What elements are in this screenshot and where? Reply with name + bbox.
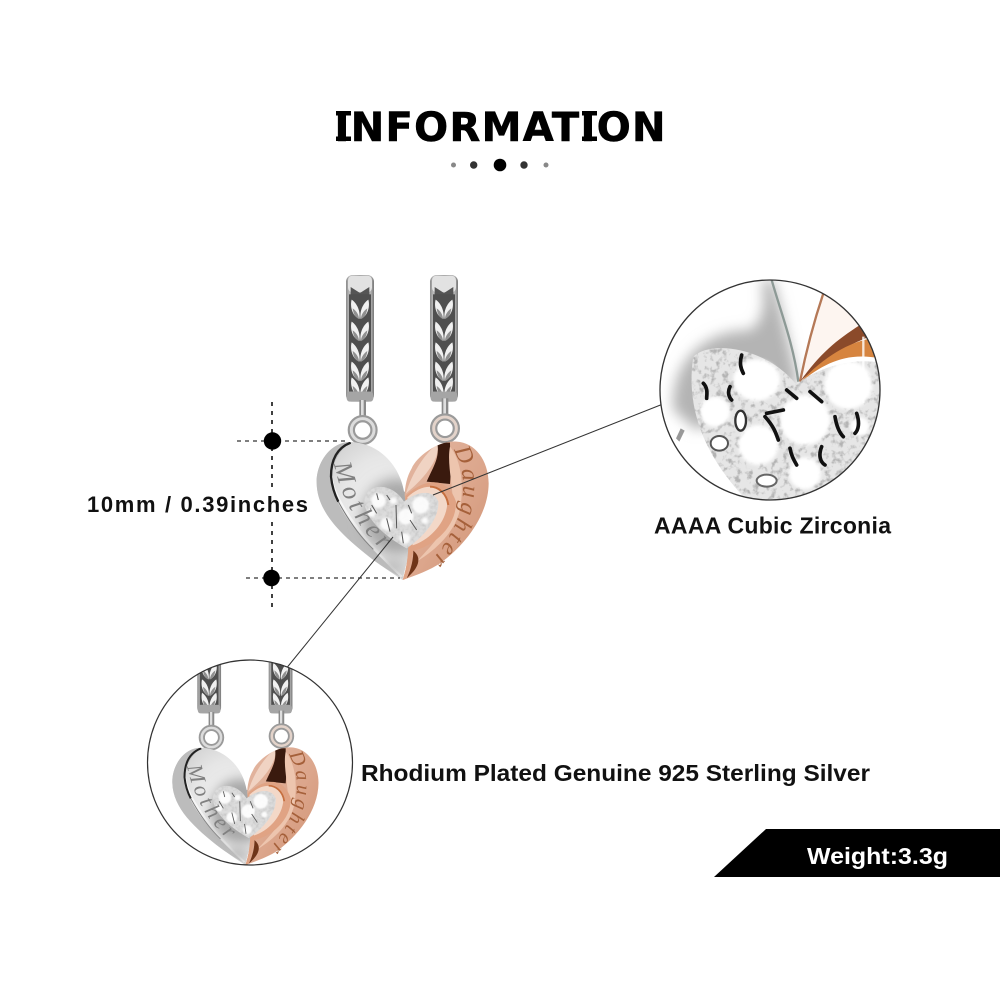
height label: 10mm / 0.39inches bbox=[87, 492, 308, 517]
main charm pendant bbox=[316, 275, 529, 620]
engraving: Mother (inset): Mother bbox=[187, 764, 235, 836]
title dots ornament bbox=[451, 159, 548, 171]
leader line to silver detail bbox=[285, 537, 393, 670]
engraving: Daughter (inset): Daughter bbox=[274, 750, 306, 854]
weight ribbon bbox=[714, 829, 1000, 877]
silver detail circle bbox=[146, 659, 354, 866]
zirconia detail circle bbox=[660, 280, 883, 503]
silver caption: Rhodium Plated Genuine 925 Sterling Silver bbox=[361, 760, 870, 786]
weight label: Weight:3.3g bbox=[807, 843, 948, 869]
engraving: Daughter: Daughter bbox=[436, 446, 474, 568]
zirconia caption: AAAA Cubic Zirconia bbox=[654, 512, 891, 538]
height dimension marker bbox=[237, 402, 400, 612]
leader line to zirconia detail bbox=[433, 404, 663, 495]
title: INFORMATION bbox=[334, 105, 666, 151]
engraving: Mother: Mother bbox=[334, 462, 390, 545]
